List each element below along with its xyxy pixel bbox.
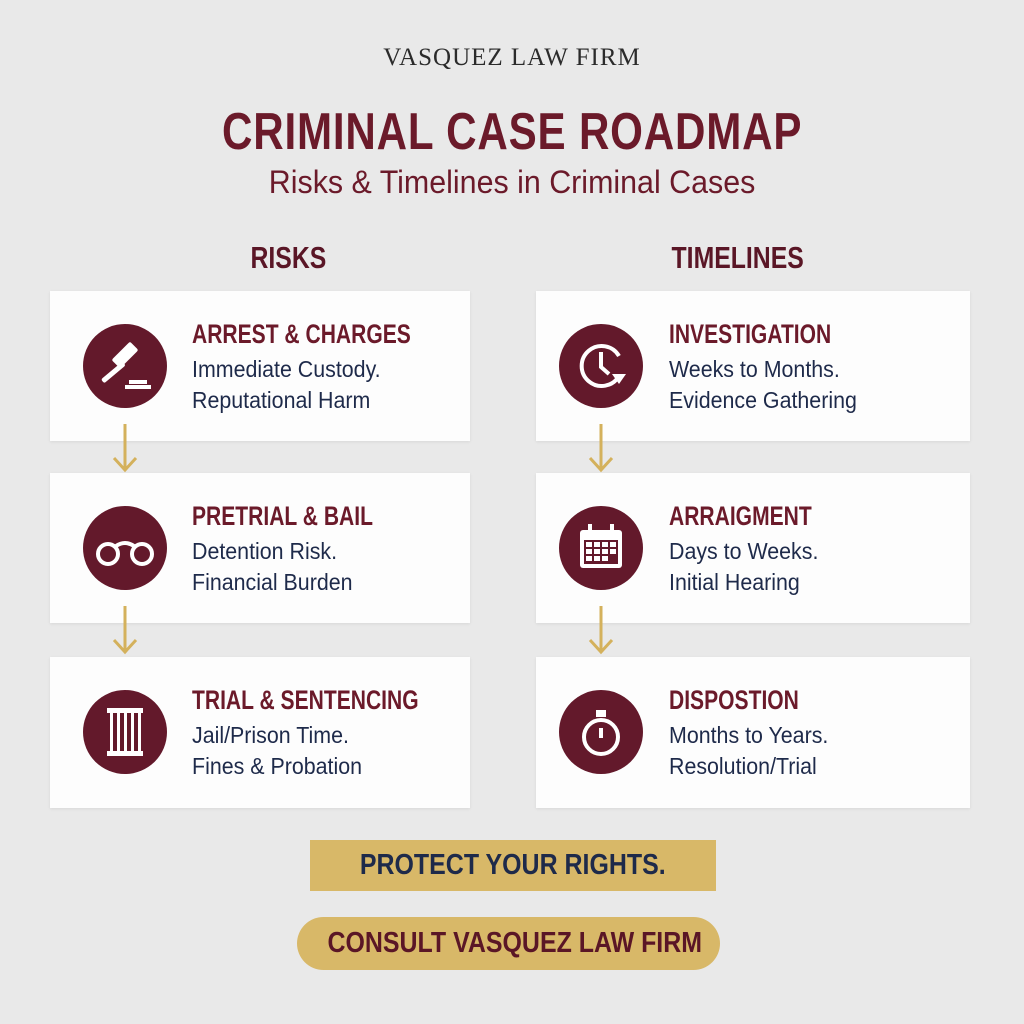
card: arraignment bbox=[536, 473, 970, 623]
icon: gavel bbox=[83, 324, 167, 408]
card: arrest & charges: ARREST & CHARGES bbox=[192, 319, 411, 349]
subtitle: Risks & Timelines in Criminal Cases bbox=[269, 164, 755, 200]
card: arraignment: ARRAIGMENT bbox=[669, 501, 812, 531]
title: CRIMINAL CASE ROADMAP bbox=[222, 103, 802, 161]
banner: protect your rights bbox=[310, 840, 716, 891]
button: consult bbox=[297, 917, 720, 970]
arrow bbox=[589, 424, 613, 472]
firm name: VASQUEZ LAW FIRM bbox=[383, 44, 641, 71]
card: arrest & charges bbox=[50, 291, 470, 441]
card: pretrial & bail: Financial Burden bbox=[192, 569, 353, 595]
card: trial & sentencing: Jail/Prison Time. bbox=[192, 722, 349, 748]
card: investigation: Evidence Gathering bbox=[669, 387, 857, 413]
card: disposition: Resolution/Trial bbox=[669, 753, 817, 779]
icon: jail bbox=[83, 690, 167, 774]
card: disposition bbox=[536, 657, 970, 808]
card: arrest & charges: Immediate Custody. bbox=[192, 356, 381, 382]
button: consult: CONSULT VASQUEZ LAW FIRM bbox=[327, 927, 702, 959]
card: trial & sentencing: Fines & Probation bbox=[192, 753, 362, 779]
card: investigation: INVESTIGATION bbox=[669, 319, 831, 349]
icon: stopwatch bbox=[559, 690, 643, 774]
card: disposition: Months to Years. bbox=[669, 722, 828, 748]
card: pretrial & bail bbox=[50, 473, 470, 623]
card: arrest & charges: Reputational Harm bbox=[192, 387, 370, 413]
banner: protect your rights: PROTECT YOUR RIGHTS. bbox=[360, 849, 666, 881]
card: pretrial & bail: Detention Risk. bbox=[192, 538, 337, 564]
card: trial & sentencing: TRIAL & SENTENCING bbox=[192, 685, 419, 715]
arrow bbox=[589, 606, 613, 654]
arrow bbox=[113, 424, 137, 472]
heading: risks: RISKS bbox=[250, 240, 326, 275]
card: trial & sentencing bbox=[50, 657, 470, 808]
icon: handcuffs bbox=[83, 506, 167, 590]
arrow bbox=[113, 606, 137, 654]
card: arraignment: Initial Hearing bbox=[669, 569, 800, 595]
card: investigation bbox=[536, 291, 970, 441]
icon: calendar bbox=[559, 506, 643, 590]
icon: clock bbox=[559, 324, 643, 408]
card: pretrial & bail: PRETRIAL & BAIL bbox=[192, 501, 373, 531]
card: investigation: Weeks to Months. bbox=[669, 356, 840, 382]
card: arraignment: Days to Weeks. bbox=[669, 538, 818, 564]
heading: timelines: TIMELINES bbox=[672, 240, 804, 275]
card: disposition: DISPOSTION bbox=[669, 685, 799, 715]
